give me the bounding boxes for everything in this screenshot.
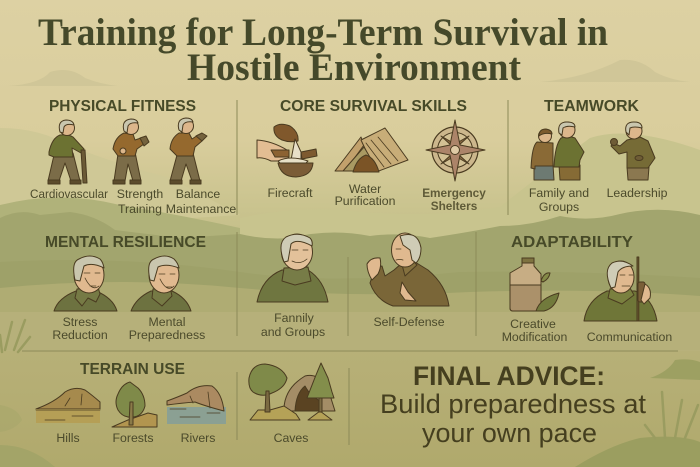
label: emergency shelters: Shelters [431,199,478,213]
icon: mental preparedness man [131,256,191,311]
label: family and groups: Family and [529,186,589,200]
label: mental preparedness: Mental [149,315,185,329]
icon: river [167,386,226,424]
label: leadership: Leadership [607,186,668,200]
icon: smiling elder [257,234,328,302]
title [38,11,608,89]
panel: terrain use [36,361,335,445]
icon: jug with leaves [510,258,559,311]
label: stress reduction: Reduction [52,328,108,342]
icon: water purification shelter [335,128,408,172]
label: communication: Communication [587,330,672,344]
label: rivers: Rivers [181,431,215,445]
icon: man with radio [584,257,657,321]
label: creative modification: Modification [502,330,567,344]
panel: family and self-defense [257,233,449,339]
label: water purification: Purification [335,194,396,208]
label: firecraft: Firecraft [267,186,313,200]
label: emergency shelters: Emergency [422,186,486,200]
icon: leadership [610,122,655,180]
callout: final advice: FINAL ADVICE: [413,361,605,391]
label: fannily and groups: and Groups [261,325,325,339]
panel: mental resilience [45,234,206,342]
icon: firecraft [257,124,317,177]
heading: physical fitness: PHYSICAL FITNESS [49,98,196,115]
label: forests: Forests [112,431,154,445]
label: creative modification: Creative [510,317,556,331]
callout: final advice: your own pace [422,418,597,448]
label: water purification: Water [349,182,381,196]
title: Hostile Environment [187,46,521,89]
panel: core survival skills [257,98,486,213]
heading: mental resilience: MENTAL RESILIENCE [45,234,206,251]
heading: terrain use: TERRAIN USE [80,361,185,378]
icon: compass [426,120,485,181]
label: stress reduction: Stress [63,315,97,329]
icon: elder with cane [48,120,87,184]
label: family and groups: Groups [539,200,579,214]
icon: caves [249,363,335,420]
label: caves: Caves [274,431,308,445]
icon: elder balance maintenance [170,118,207,184]
label: balance maintenance: Balance [176,187,220,201]
icon: forest tree [112,382,157,427]
panel: physical fitness [30,98,236,216]
label: hills: Hills [56,431,80,445]
label: mental preparedness: Preparedness [129,328,205,342]
panel: teamwork [529,98,668,214]
heading: teamwork: TEAMWORK [544,98,640,115]
label: fannily and groups: Fannily [274,311,314,325]
label: balance maintenance: Maintenance [166,202,236,216]
icon: stress reduction man [54,256,117,311]
label: strength training: Training [118,202,162,216]
section dividers [22,100,678,445]
heading: adaptability: ADAPTABILITY [511,234,634,251]
icon: hills [36,388,100,423]
panel: adaptability [502,234,672,344]
title: Training for Long-Term Survival in [38,11,608,54]
icon: elder strength training [113,119,149,184]
label: self-defense: Self-Defense [373,315,445,329]
label: cardiovascular: Cardiovascular [30,187,108,201]
label: strength training: Strength [117,187,163,201]
callout: final advice [380,361,647,448]
icon: man with raised fist [367,233,449,306]
callout: final advice: Build preparedness at [380,389,647,419]
heading: core survival skills: CORE SURVIVAL SKILLS [280,98,467,115]
icon: family and groups [531,122,584,180]
